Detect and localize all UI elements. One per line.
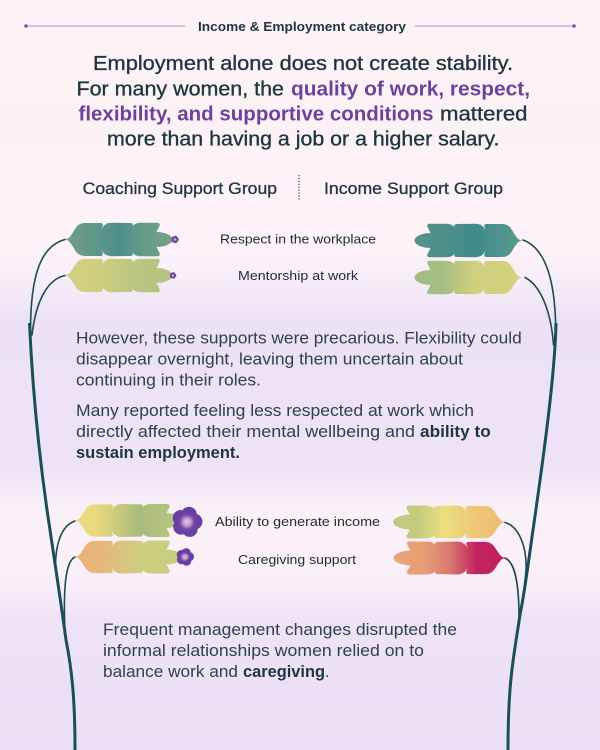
label: income generation: Ability to generate income <box>215 514 380 529</box>
grain: caregiving, coaching <box>75 541 182 573</box>
main heading <box>76 53 530 150</box>
text block: management changes: balance work and <box>103 663 238 681</box>
right wheat stalk, upper <box>508 240 556 750</box>
label: caregiving: Caregiving support <box>238 552 356 567</box>
label: respect: Respect in the workplace <box>220 232 376 246</box>
text block: management changes: Frequent management changes disrupted the <box>103 621 457 639</box>
main heading: more than having a job or a higher salary. <box>107 128 500 150</box>
text block: precarious supports: disappear overnight, leaving them uncertain about <box>76 350 463 368</box>
text block: precarious supports: However, these supports were precarious. Flexibility could <box>76 330 522 348</box>
text block: precarious supports: directly affected their mental wellbeing and <box>76 423 415 441</box>
grain: respect, income <box>414 224 522 257</box>
right stems, lower <box>505 522 526 625</box>
left wheat stalk, upper <box>30 240 75 750</box>
label: mentorship: Mentorship at work <box>238 268 359 283</box>
grain: mentorship, coaching <box>65 259 172 292</box>
group headers: Income Support Group <box>324 179 503 198</box>
text block: precarious supports: Many reported feeling less respected at work which <box>76 402 474 420</box>
text block: precarious supports <box>76 330 522 462</box>
main heading: quality of work, respect, <box>291 78 530 100</box>
main heading: Employment alone does not create stability. <box>93 53 513 75</box>
text block: precarious supports: ability to <box>420 423 491 441</box>
left stems, lower <box>56 521 75 632</box>
main heading: For many women, the <box>76 78 284 100</box>
text block: precarious supports: continuing in their roles. <box>76 372 261 390</box>
flower: mentorship, coaching <box>169 272 176 279</box>
main heading: mattered <box>440 104 528 126</box>
text block: management changes <box>103 621 457 681</box>
category header <box>24 19 576 34</box>
grain: mentorship, income <box>414 261 522 294</box>
flower: income generation, coaching <box>170 505 203 539</box>
category header: Income & Employment category <box>198 19 407 34</box>
grain: caregiving, income <box>394 542 506 574</box>
grain: income generation, coaching <box>75 504 182 537</box>
grain: respect, coaching <box>65 223 172 256</box>
flower: caregiving, coaching <box>175 547 194 567</box>
text block: precarious supports: sustain employment. <box>76 444 240 462</box>
group headers <box>83 175 503 200</box>
main heading: flexibility, and supportive conditions <box>78 104 434 126</box>
text block: management changes: informal relationships women relied on to <box>103 642 424 660</box>
text block: management changes: . <box>325 663 330 681</box>
grain: income generation, income <box>393 506 505 538</box>
group headers: Coaching Support Group <box>83 179 277 198</box>
text block: management changes: caregiving <box>243 663 325 681</box>
flower: respect, coaching <box>171 235 179 244</box>
